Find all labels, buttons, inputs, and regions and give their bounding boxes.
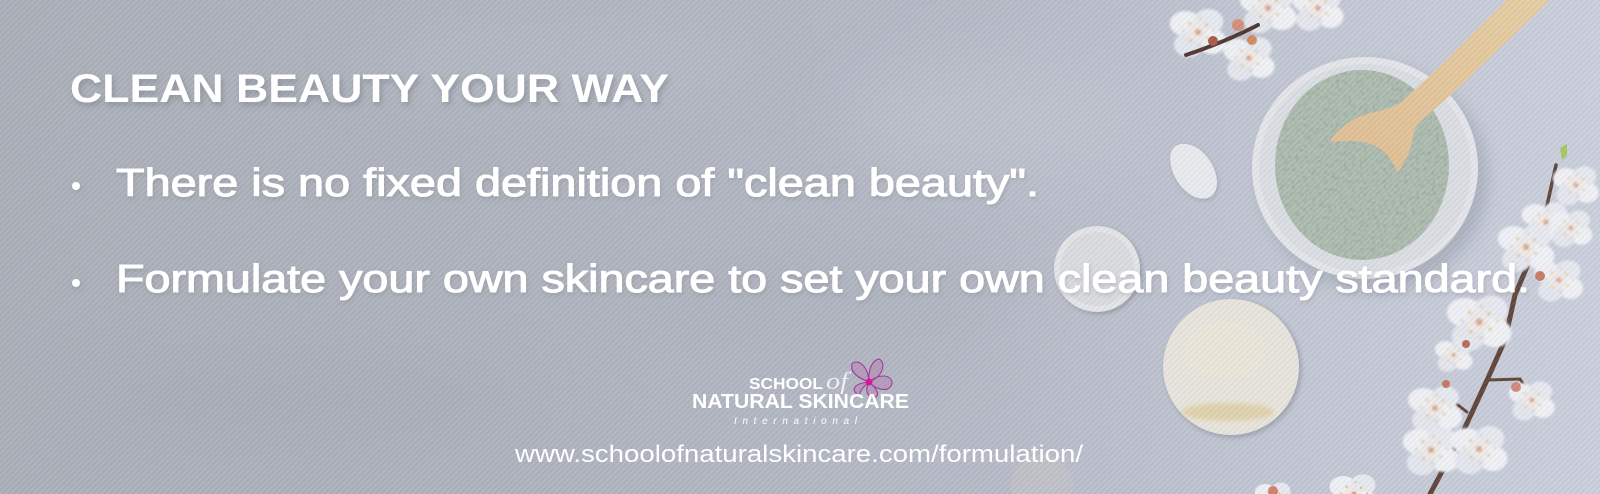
logo: SCHOOL: SCHOOL <box>749 376 823 393</box>
logo: NATURAL SKINCARE: NATURAL SKINCARE <box>692 391 909 413</box>
photo: wooden spoon <box>1330 0 1550 172</box>
photo: white pebble <box>1170 144 1218 201</box>
photo: blossom branch, top <box>1170 0 1344 81</box>
title: CLEAN BEAUTY YOUR WAY <box>70 67 669 111</box>
logo: School of Natural Skincare International <box>692 359 909 427</box>
photo: small white cream disc <box>1054 226 1142 314</box>
logo: of: of <box>826 369 852 395</box>
photo: bowl of green clay powder <box>1252 57 1488 290</box>
photo: blossom branch, right <box>1403 144 1599 494</box>
logo: International: International <box>734 416 858 427</box>
photo: blossoms cut off at bottom edge <box>1255 474 1378 494</box>
bullet point 1: There is no fixed definition of "clean beauty". <box>116 162 1039 205</box>
bullet list <box>72 162 1530 301</box>
photo: cream scrub disc <box>1163 299 1302 438</box>
bullet point 2: Formulate your own skincare to set your own clean beauty standard. <box>116 258 1530 301</box>
photo: faint jar at bottom <box>1011 455 1073 494</box>
icon: pink flower <box>852 359 892 397</box>
website URL: www.schoolofnaturalskincare.com/formulation/ <box>514 441 1083 468</box>
